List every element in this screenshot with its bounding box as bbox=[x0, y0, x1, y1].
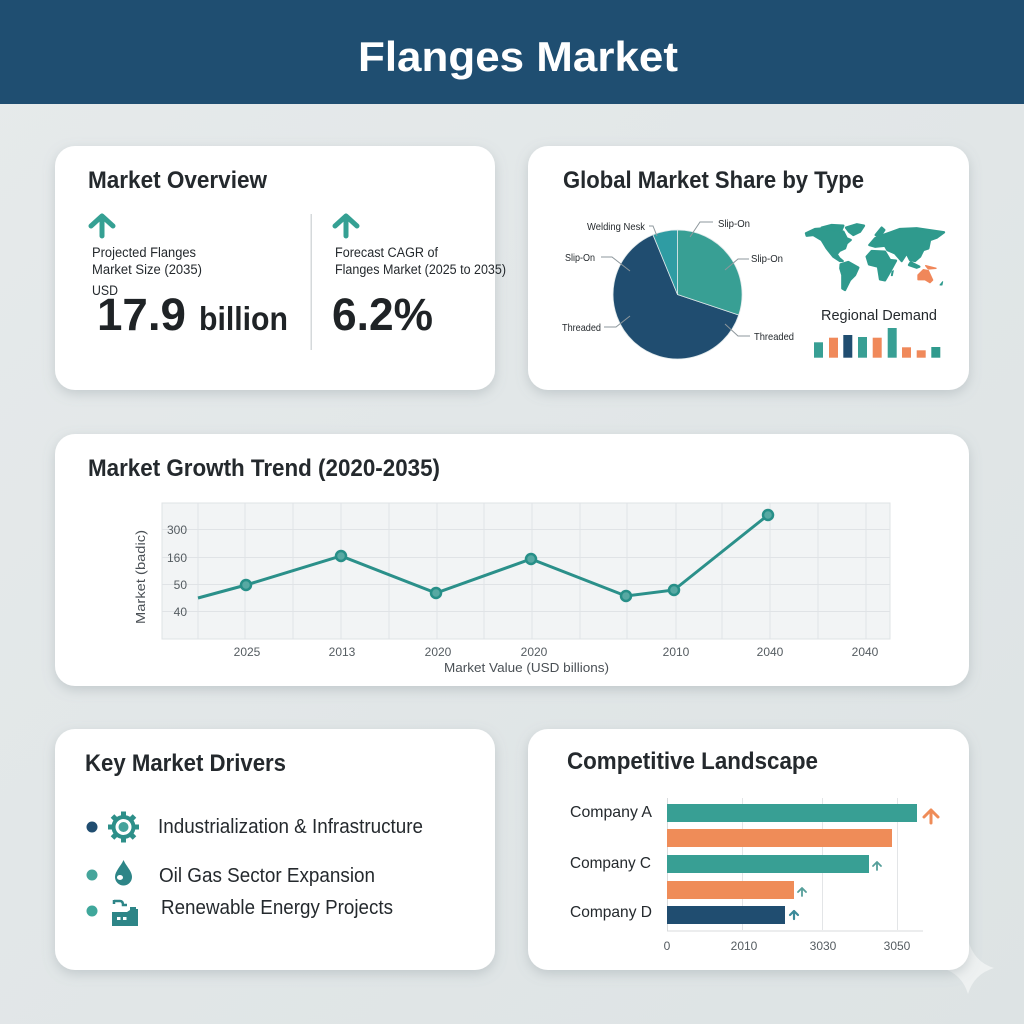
icon: up arrow size bbox=[91, 216, 113, 236]
axis labels: 0 bbox=[664, 939, 671, 953]
pie chart bbox=[613, 230, 742, 359]
driver: renewable energy bbox=[86, 897, 393, 926]
heading: regional demand: Regional Demand bbox=[821, 307, 937, 324]
company labels: Company A bbox=[570, 804, 652, 821]
decorative sparkle bbox=[942, 940, 994, 994]
heading: market overview: Market Overview bbox=[88, 167, 267, 194]
stat: 17.9 billion bbox=[97, 289, 288, 340]
x axis labels: 2040 bbox=[757, 645, 784, 659]
axis labels bbox=[664, 939, 911, 953]
company labels bbox=[570, 804, 652, 921]
axis labels: 3030 bbox=[810, 939, 837, 953]
text: cagr label: Forecast CAGR of bbox=[335, 245, 438, 260]
header banner bbox=[0, 0, 1024, 104]
heading: key market drivers: Key Market Drivers bbox=[85, 750, 286, 777]
panel: market growth trend bbox=[55, 434, 969, 686]
x axis labels: 2040 bbox=[852, 645, 879, 659]
line chart bbox=[133, 503, 890, 675]
x axis labels: 2010 bbox=[663, 645, 690, 659]
pie labels: Slip-On bbox=[751, 253, 783, 265]
driver: industrialization bbox=[86, 812, 423, 842]
data points bbox=[241, 510, 773, 601]
pie leader lines bbox=[601, 222, 750, 336]
world map bbox=[806, 224, 944, 290]
heading: competitive landscape: Competitive Landscape bbox=[567, 748, 818, 775]
company labels: Company D bbox=[570, 904, 652, 921]
icon: water drop bbox=[115, 860, 132, 886]
panel: market overview bbox=[55, 146, 506, 390]
pie labels: Slip-On bbox=[565, 252, 595, 264]
heading: global market share: Global Market Share by Type bbox=[563, 167, 864, 194]
company labels: Company C bbox=[570, 855, 651, 872]
driver: oil gas bbox=[86, 860, 375, 887]
icon: gear bbox=[108, 812, 139, 842]
text: cagr label: Flanges Market (2025 to 2035) bbox=[335, 262, 506, 277]
x axis labels bbox=[234, 645, 879, 659]
text: market size label bbox=[92, 245, 202, 298]
pie labels: Slip-On bbox=[718, 218, 750, 230]
x axis title: Market Value (USD billions) bbox=[444, 660, 609, 675]
axis labels: 3050 bbox=[884, 939, 911, 953]
pie labels: Threaded bbox=[562, 322, 601, 334]
icon: up arrow cagr bbox=[335, 216, 357, 236]
stat: 6.2%: 6.2% bbox=[332, 289, 433, 340]
stat: 17.9 billion: 17.9 bbox=[97, 289, 186, 340]
panel: key market drivers bbox=[55, 729, 495, 970]
y axis labels bbox=[167, 523, 187, 619]
axis labels: 2010 bbox=[731, 939, 758, 953]
text: cagr label bbox=[335, 245, 506, 277]
driver: renewable energy: Renewable Energy Projects bbox=[161, 897, 393, 919]
icon: factory bbox=[112, 900, 138, 926]
x axis labels: 2020 bbox=[425, 645, 452, 659]
y axis labels: 50 bbox=[174, 578, 187, 592]
panel: competitive landscape bbox=[528, 729, 969, 970]
y axis labels: 40 bbox=[174, 605, 187, 619]
x axis labels: 2013 bbox=[329, 645, 356, 659]
heading: market growth trend: Market Growth Trend (2020-2035) bbox=[88, 455, 440, 482]
bar chart: regional demand bbox=[814, 328, 940, 358]
trend arrows bbox=[790, 810, 938, 919]
x axis labels: 2020 bbox=[521, 645, 548, 659]
y axis labels: 160 bbox=[167, 551, 187, 565]
y axis labels: 300 bbox=[167, 523, 187, 537]
panel: global market share bbox=[528, 146, 969, 390]
title: Flanges Market bbox=[358, 33, 678, 80]
driver: oil gas: Oil Gas Sector Expansion bbox=[159, 865, 375, 887]
pie labels: Threaded bbox=[754, 331, 794, 343]
text: market size label: Market Size (2035) bbox=[92, 262, 202, 277]
text: market size label: USD bbox=[92, 283, 118, 298]
driver: industrialization: Industrialization & Infrastructure bbox=[158, 816, 423, 838]
pie labels bbox=[562, 218, 794, 343]
trend line bbox=[198, 515, 768, 598]
stat: 17.9 billion: billion bbox=[199, 300, 288, 337]
y axis title: Market (badic) bbox=[133, 530, 148, 624]
bar chart: companies bbox=[570, 798, 938, 953]
pie labels: Welding Nesk bbox=[587, 221, 646, 233]
text: market size label: Projected Flanges bbox=[92, 245, 196, 260]
x axis labels: 2025 bbox=[234, 645, 261, 659]
